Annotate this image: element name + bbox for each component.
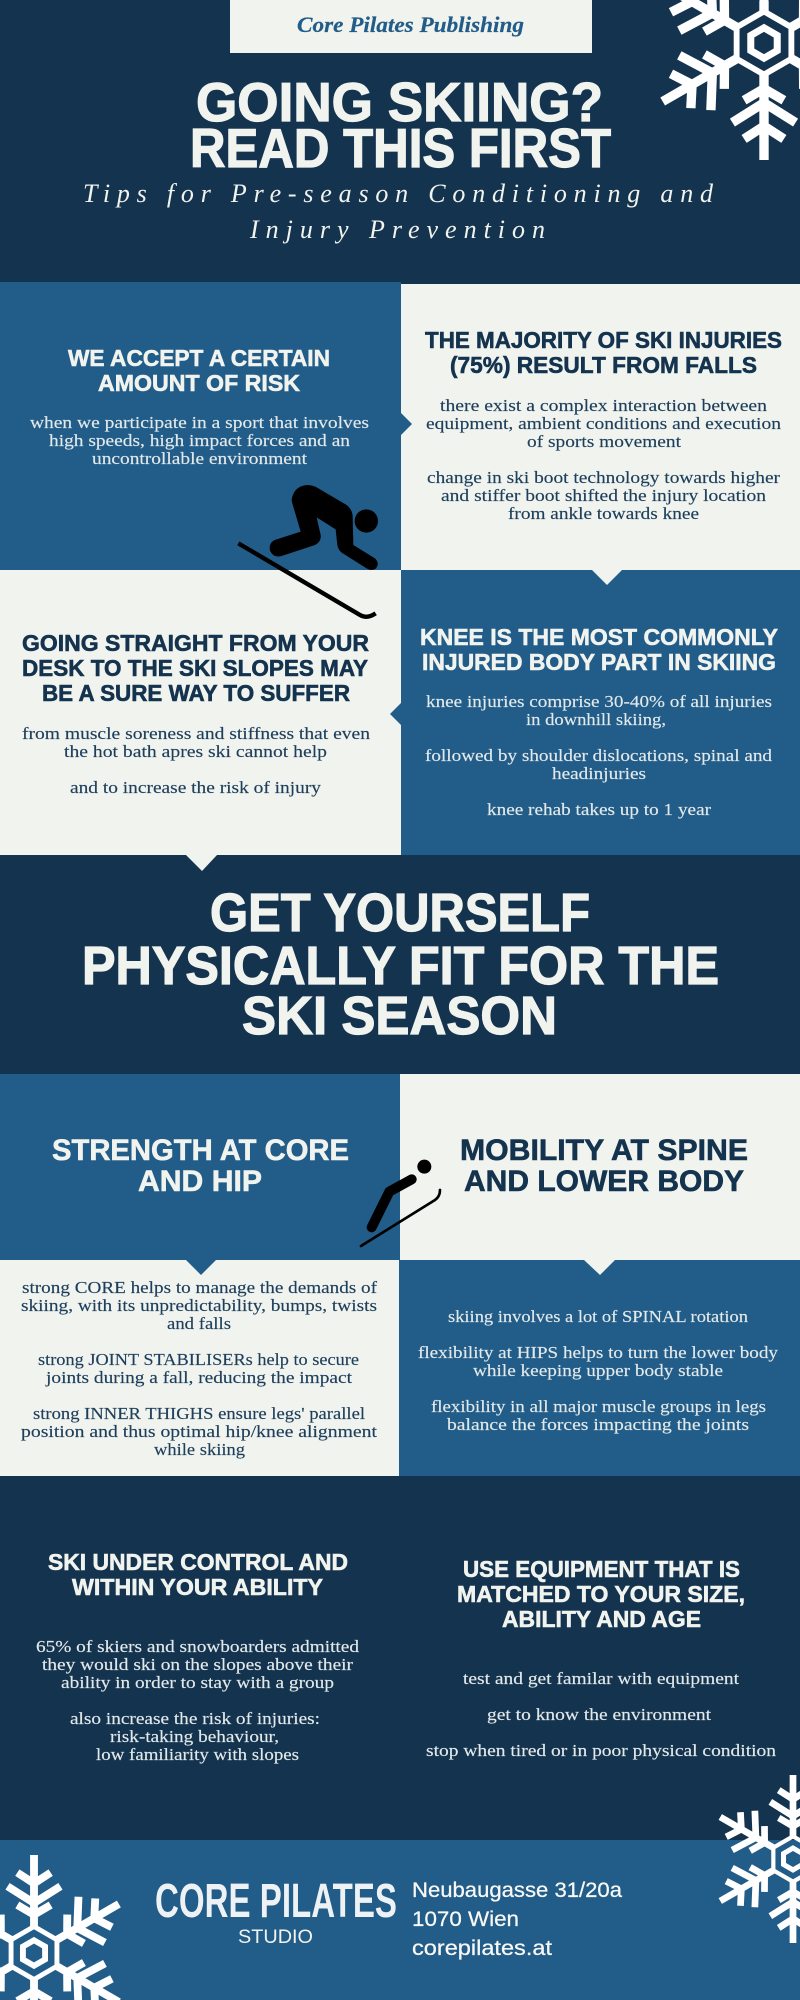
heading: desk to slopes: DESK TO THE SKI SLOPES MAY [22,655,368,681]
text: strength: joints during a fall, reducing the impact [45,1368,352,1387]
text: accept risk: when we participate in a sport that involves [30,413,369,432]
heading: equipment [457,1556,745,1632]
text: accept risk [30,413,369,468]
heading: equipment: USE EQUIPMENT THAT IS [463,1556,740,1582]
text: ski under control: low familiarity with slopes [96,1745,299,1764]
heading: accept risk [68,345,330,396]
text: falls: there exist a complex interaction between [440,396,768,415]
panel: strength heading: AND HIP [138,1165,262,1198]
arrow: falls panel pointer down [591,569,623,585]
heading: desk to slopes: BE A SURE WAY TO SUFFER [42,680,350,706]
heading: ski under control: SKI UNDER CONTROL AND [48,1549,348,1575]
text: knee: headinjuries [552,764,646,783]
panel: strength heading [0,1074,400,1260]
heading: desk to slopes: GOING STRAIGHT FROM YOUR [22,630,369,656]
text: accept risk: high speeds, high impact forces and an [49,431,351,450]
footer [0,1840,800,2000]
text: knee [425,692,773,819]
publisher box: Core Pilates Publishing [297,12,524,37]
title: GOING SKIING? [196,71,603,133]
subtitle [83,179,714,244]
text: mobility: flexibility at HIPS helps to turn the lower body [418,1343,779,1362]
contact details: 1070 Wien [412,1908,519,1931]
text: knee: knee injuries comprise 30-40% of all injuries [426,692,772,711]
text: mobility [418,1307,779,1434]
text: desk to slopes [22,724,371,797]
text: falls: change in ski boot technology towards higher [427,468,780,487]
text: mobility: balance the forces impacting the joints [447,1415,749,1434]
heading: get fit: GET YOURSELF [210,883,590,943]
heading: ski under control [48,1549,348,1600]
arrow: desk panel pointer down [186,855,217,871]
heading: equipment: MATCHED TO YOUR SIZE, [457,1581,745,1607]
logo: core pilates studio [155,1875,397,1948]
heading: falls: THE MAJORITY OF SKI INJURIES [425,327,782,353]
panel: falls [401,284,800,570]
text: strength [21,1278,377,1459]
header panel [83,0,800,244]
arrow: strength pointer down [186,1260,216,1275]
heading: knee [420,624,778,675]
text: ski under control: risk-taking behaviour, [110,1727,279,1746]
heading: knee: KNEE IS THE MOST COMMONLY [420,624,778,650]
text: falls: from ankle towards knee [508,504,699,523]
text: accept risk: uncontrollable environment [92,449,307,468]
icon: ski jumper [361,1160,440,1246]
logo: core pilates studio: STUDIO [238,1927,313,1948]
text: falls: and stiffer boot shifted the injury location [441,486,767,505]
title [190,71,611,179]
heading: get fit: PHYSICALLY FIT FOR THE [82,936,719,996]
heading: knee: INJURED BODY PART IN SKIING [422,649,776,675]
text: ski under control: 65% of skiers and snowboarders admitted [36,1637,360,1656]
title: READ THIS FIRST [190,117,611,179]
heading: accept risk: WE ACCEPT A CERTAIN [68,345,330,371]
panel: desk to slopes [0,570,401,855]
heading: get fit [82,883,719,1046]
text: strength: while skiing [154,1440,246,1459]
text: falls: equipment, ambient conditions and execution [426,414,782,433]
heading: ski under control: WITHIN YOUR ABILITY [72,1574,323,1600]
heading: desk to slopes [22,630,369,706]
heading: falls [425,327,782,378]
contact details [412,1879,622,1960]
panel: mobility heading: MOBILITY AT SPINE [460,1134,748,1167]
text: knee: in downhill skiing, [526,710,666,729]
text: falls [426,396,782,523]
text: mobility: while keeping upper body stable [473,1361,723,1380]
panel: equipment [426,1556,777,1760]
arrow: mobility pointer down [584,1260,615,1275]
text: equipment: test and get familar with equipment [463,1669,739,1688]
icon: snowflake bottom right [709,1775,800,1943]
icon: snowflake bottom left [0,1855,132,2000]
heading: accept risk: AMOUNT OF RISK [98,370,300,396]
panel: strength text [0,1260,399,1476]
text: ski under control: also increase the risk of injuries: [70,1709,320,1728]
text: strength: skiing, with its unpredictability, bumps, twists [21,1296,377,1315]
heading: get fit: SKI SEASON [242,986,557,1046]
panel: mobility heading [400,1074,800,1260]
text: strength: strong JOINT STABILISERs help to secure [38,1350,359,1369]
icon: downhill skier [238,485,378,617]
publisher box [230,0,592,53]
heading: equipment: ABILITY AND AGE [502,1606,701,1632]
panel: ski under control [36,1549,360,1764]
panel: accept risk [0,282,401,570]
arrow: knee panel pointer [390,703,401,725]
heading: falls: (75%) RESULT FROM FALLS [450,352,757,378]
text: desk to slopes: and to increase the risk of injury [70,778,322,797]
text: ski under control: ability in order to stay with a group [61,1673,334,1692]
text: mobility: skiing involves a lot of SPINAL rotation [448,1307,749,1326]
contact details: corepilates.at [412,1937,552,1960]
text: falls: of sports movement [527,432,681,451]
panel: strength heading: STRENGTH AT CORE [52,1134,349,1167]
text: mobility: flexibility in all major muscle groups in legs [431,1397,766,1416]
text: knee: knee rehab takes up to 1 year [487,800,711,819]
text: desk to slopes: from muscle soreness and stiffness that even [22,724,371,743]
text: knee: followed by shoulder dislocations, spinal and [425,746,773,765]
band: get fit [0,855,800,1074]
text: ski under control [36,1637,360,1764]
text: strength: and falls [167,1314,231,1333]
text: strength: strong INNER THIGHS ensure legs' parallel [33,1404,365,1423]
subtitle: Injury Prevention [249,215,545,244]
text: ski under control: they would ski on the slopes above their [42,1655,353,1674]
text: strength: position and thus optimal hip/knee alignment [21,1422,377,1441]
text: equipment: get to know the environment [487,1705,711,1724]
contact details: Neubaugasse 31/20a [412,1879,622,1902]
text: equipment: stop when tired or in poor physical condition [426,1741,777,1760]
text: strength: strong CORE helps to manage the demands of [22,1278,377,1297]
arrow: falls panel pointer [401,413,412,435]
panel: mobility heading: AND LOWER BODY [464,1165,744,1198]
panel: mobility text [399,1260,800,1476]
text: equipment [426,1669,777,1760]
panel: knee [390,569,800,857]
subtitle: Tips for Pre-season Conditioning and [83,179,714,208]
icon: snowflake top right [647,0,800,160]
logo: core pilates studio: CORE PILATES [155,1875,397,1928]
text: desk to slopes: the hot bath apres ski cannot help [64,742,327,761]
